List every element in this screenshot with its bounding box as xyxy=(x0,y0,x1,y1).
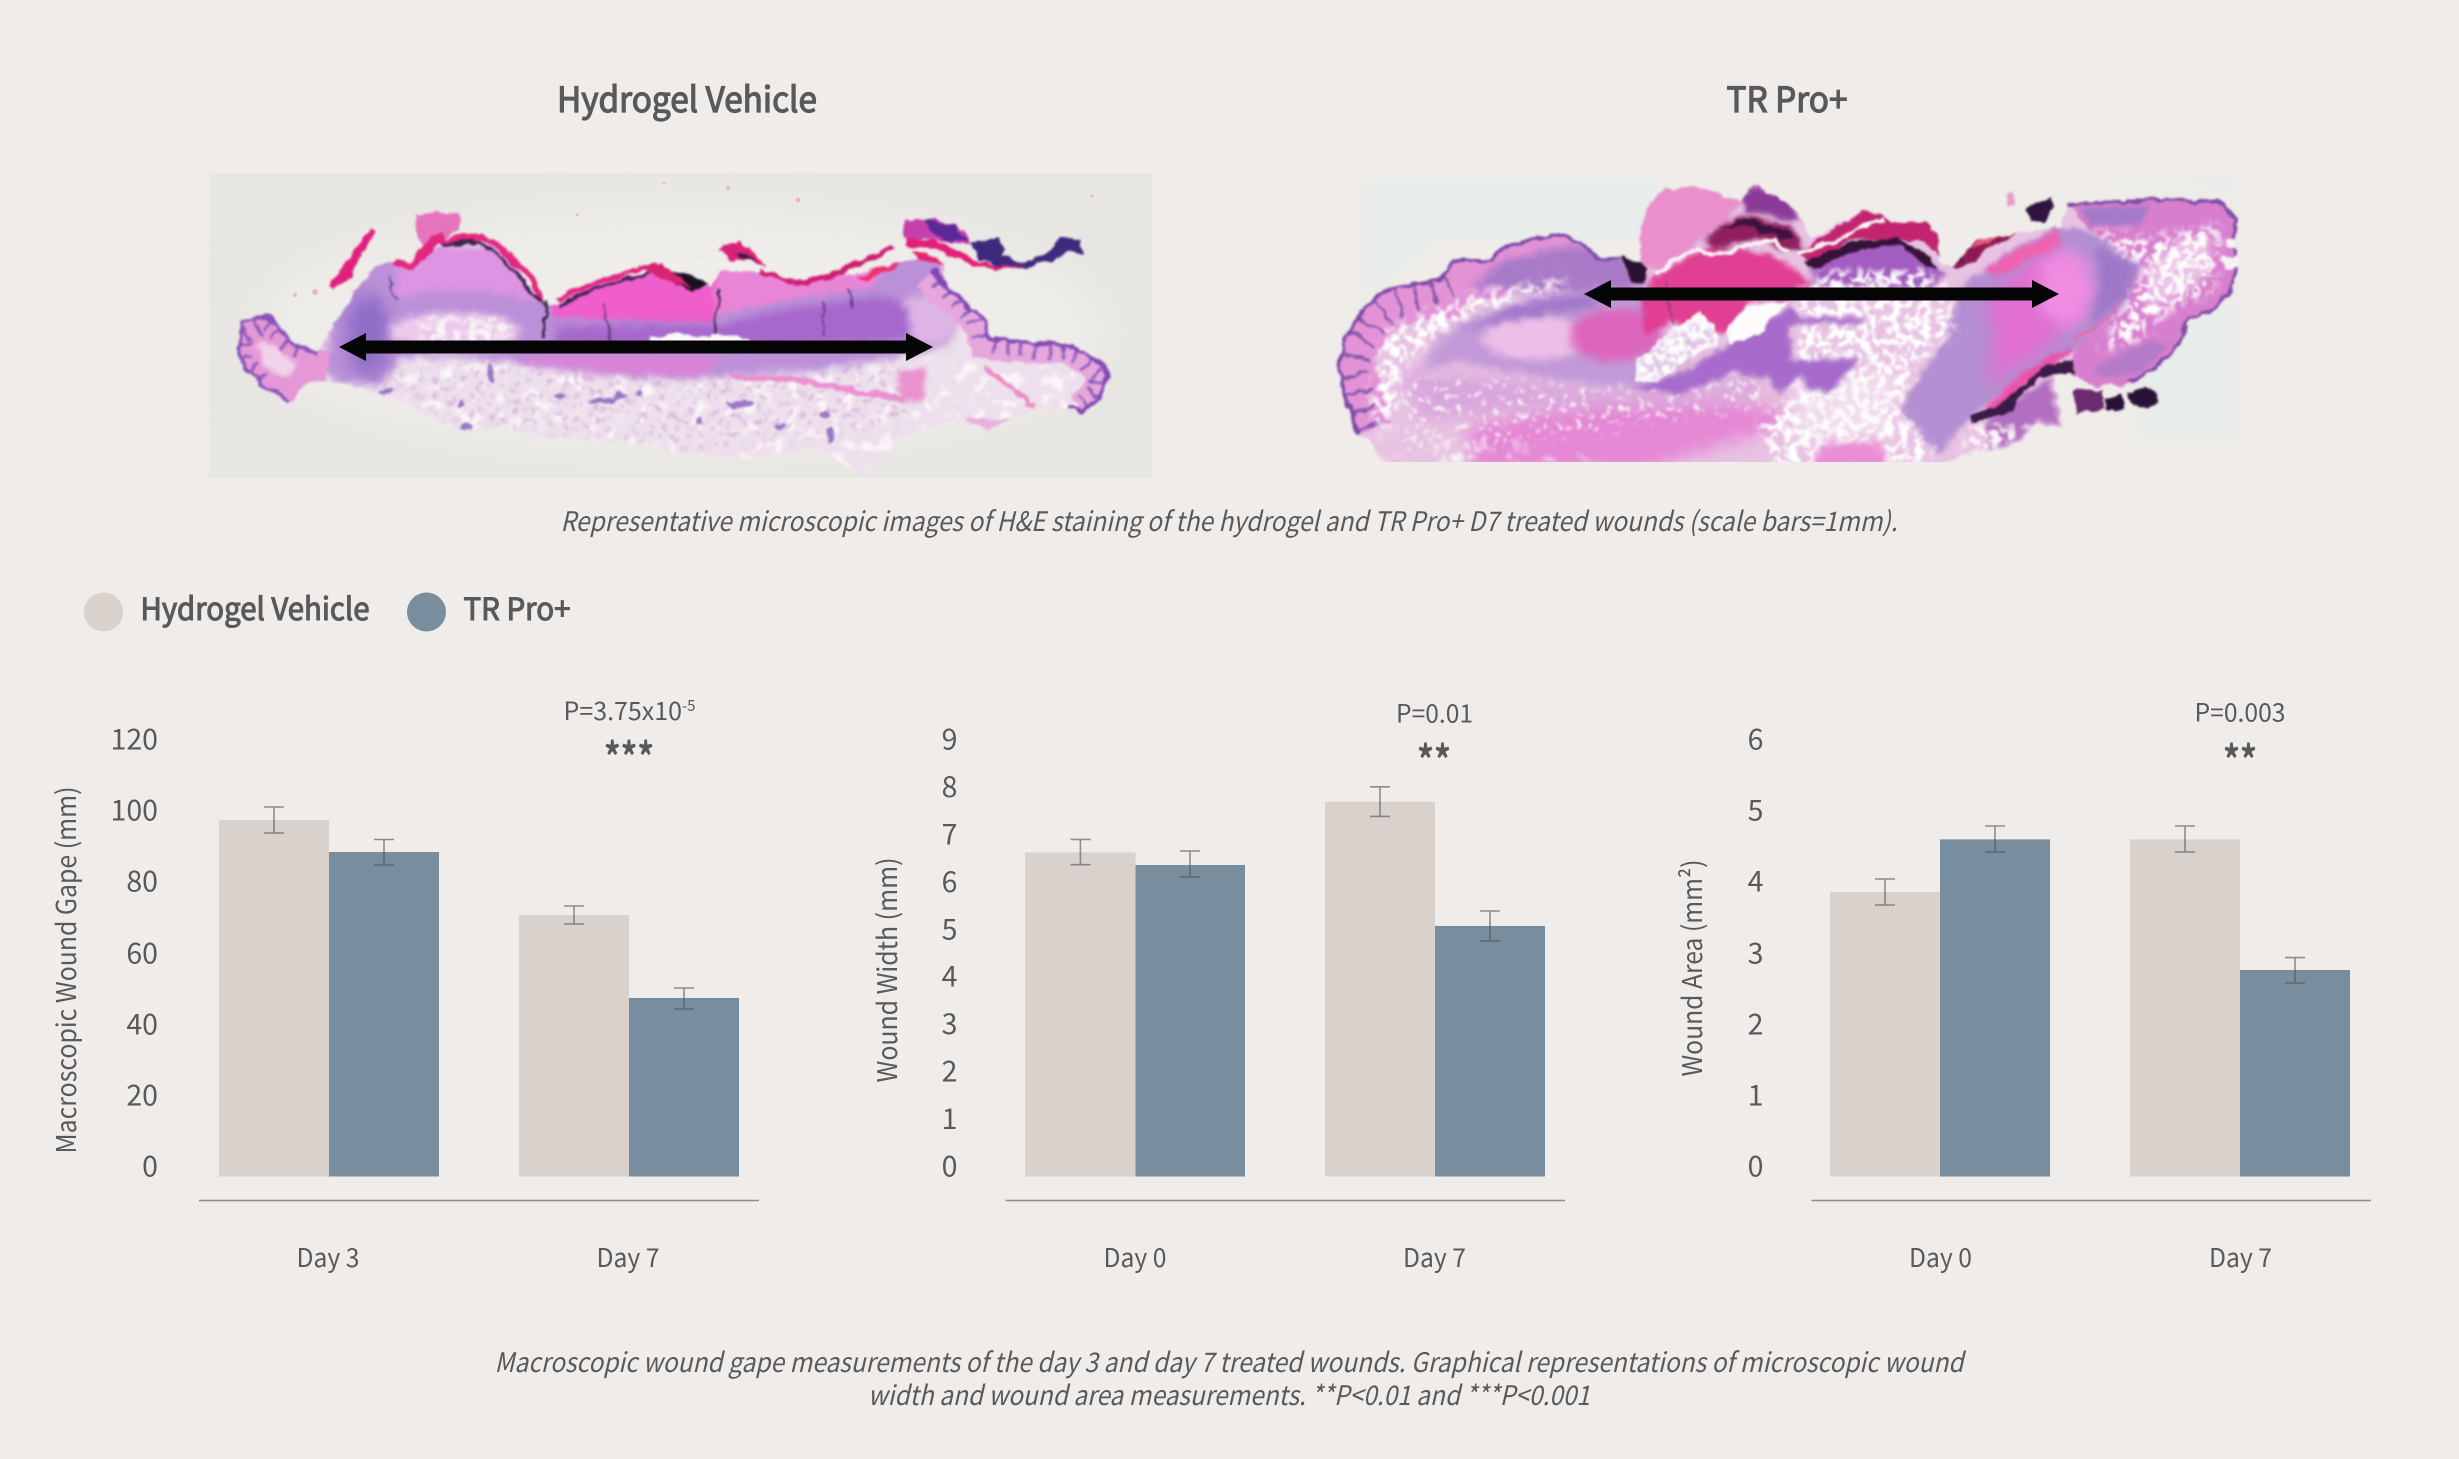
bars: day 7 xyxy=(2130,839,2350,1176)
y axis ticks xyxy=(1748,718,1764,1186)
significance: p value: ** xyxy=(1417,729,1451,787)
chart: macroscopic wound gape xyxy=(45,692,759,1275)
caption: charts xyxy=(494,1341,1966,1413)
significance: p value: *** xyxy=(604,726,654,784)
y axis ticks: 20 xyxy=(126,1074,158,1114)
significance: p value: ** xyxy=(2223,729,2257,787)
y axis ticks: 6 xyxy=(1748,718,1764,758)
x labels xyxy=(1909,1238,2272,1275)
x axis line xyxy=(1812,1200,2371,1202)
right end of section xyxy=(2067,198,2237,387)
y axis ticks: 9 xyxy=(942,718,958,758)
significance: p value: P=0.01 xyxy=(1396,694,1473,730)
x axis line xyxy=(1006,1200,1565,1202)
y axis ticks: 7 xyxy=(942,812,958,853)
y axis ticks xyxy=(942,718,958,1186)
left flap xyxy=(237,313,330,403)
central purple strands xyxy=(1633,306,1860,395)
y axis ticks: 40 xyxy=(126,1002,158,1044)
y axis ticks: 3 xyxy=(942,1002,958,1043)
heading: TR Pro+: TR Pro+ xyxy=(1726,72,1848,123)
y axis ticks: 3 xyxy=(1748,932,1764,972)
y axis title: Wound Area (mm²) xyxy=(1671,860,1710,1076)
y axis ticks: 2 xyxy=(942,1050,958,1091)
right pink mass xyxy=(1900,225,2142,455)
x labels: Day 7 xyxy=(596,1238,660,1275)
y axis ticks: 5 xyxy=(942,907,958,948)
error bars xyxy=(1070,787,1500,941)
y axis ticks: 0 xyxy=(942,1144,958,1186)
significance: p value xyxy=(2194,694,2286,787)
significance: p value: P=0.003 xyxy=(2194,694,2286,730)
x labels xyxy=(296,1238,660,1275)
white spongy right of centre xyxy=(1760,285,1955,470)
micrograph: hydrogel vehicle wound section xyxy=(234,182,1113,475)
significance: p value xyxy=(564,692,696,784)
legend item: Hydrogel Vehicle: Hydrogel Vehicle xyxy=(140,584,370,629)
lavender granulation xyxy=(1420,288,1660,388)
bars: day 3 xyxy=(219,820,439,1176)
lower dermis mottling xyxy=(331,358,1078,466)
micrograph: TR Pro+ wound section xyxy=(1330,173,2242,473)
arrow: wound gape measure xyxy=(339,333,933,361)
y axis ticks: 1 xyxy=(1748,1074,1764,1114)
error bars xyxy=(264,807,694,1009)
y axis ticks: 6 xyxy=(942,860,958,901)
dermal vessels xyxy=(378,363,833,444)
y axis ticks: 5 xyxy=(1748,788,1764,830)
cracks xyxy=(543,300,547,340)
bars: day 0 xyxy=(1025,852,1245,1176)
y axis ticks xyxy=(111,718,158,1186)
y axis ticks: 2 xyxy=(1748,1002,1764,1044)
caption: micrographs: Representative microscopic images of H&E staining of the hydrogel and TR Pro+ D7 treated wounds (scale bars=1mm). xyxy=(560,500,1898,539)
x labels: Day 3 xyxy=(296,1238,360,1275)
y axis ticks: 100 xyxy=(111,788,158,830)
chart: wound area xyxy=(1671,694,2371,1275)
x labels: Day 7 xyxy=(2209,1238,2272,1275)
error bars xyxy=(1875,826,2305,983)
x labels xyxy=(1104,1238,1466,1275)
x labels: Day 0 xyxy=(1104,1238,1166,1275)
hot pink wound bed xyxy=(1640,246,1813,335)
y axis title: Wound Width (mm) xyxy=(866,858,905,1082)
y axis ticks: 0 xyxy=(1748,1144,1764,1186)
lower right xyxy=(1985,378,2060,448)
caption: charts: Macroscopic wound gape measurements of the day 3 and day 7 treated wounds. Graphical representations of microscopic wound xyxy=(494,1341,1966,1380)
y axis ticks: 4 xyxy=(1748,860,1764,900)
y axis title: Macroscopic Wound Gape (mm) xyxy=(45,786,84,1154)
arrow: wound gape measure xyxy=(1584,280,2059,308)
left rim xyxy=(1337,233,1640,435)
y axis ticks: 60 xyxy=(126,932,158,972)
y axis ticks: 8 xyxy=(942,765,958,806)
legend item: TR Pro+ xyxy=(407,584,570,632)
crusted scab xyxy=(329,228,375,290)
significance: p value: -5 xyxy=(682,695,696,716)
right flap xyxy=(933,270,1110,413)
significance: p value: P=3.75x10 xyxy=(564,692,682,728)
pink strands xyxy=(730,377,905,400)
x labels: Day 0 xyxy=(1909,1238,1972,1275)
y axis ticks: 80 xyxy=(126,860,158,900)
lower dermis xyxy=(1470,398,1785,472)
x labels: Day 7 xyxy=(1403,1238,1466,1275)
y axis ticks: 4 xyxy=(942,955,958,996)
y axis ticks: 1 xyxy=(942,1097,958,1138)
legend xyxy=(84,584,570,632)
bars: day 7 xyxy=(519,915,739,1176)
heading: Hydrogel Vehicle: Hydrogel Vehicle xyxy=(557,72,817,123)
pale crust xyxy=(1640,185,1744,272)
epidermal band xyxy=(322,250,960,386)
significance: p value xyxy=(1396,694,1473,787)
upper right scab xyxy=(1810,243,1945,288)
x axis line xyxy=(199,1200,759,1202)
bars: day 7 xyxy=(1325,802,1545,1176)
chart: wound width xyxy=(866,694,1565,1275)
white fat lobes xyxy=(1637,312,1720,382)
bars: day 0 xyxy=(1830,839,2050,1176)
legend item: TR Pro+: TR Pro+ xyxy=(464,584,570,629)
y axis ticks: 120 xyxy=(111,718,158,758)
upper right white fat xyxy=(1815,268,1935,290)
dark clump at left crust xyxy=(1618,252,1648,284)
caption: charts: width and wound area measurements. **P<0.01 and ***P<0.001 xyxy=(868,1374,1590,1413)
y axis ticks: 0 xyxy=(142,1144,158,1186)
